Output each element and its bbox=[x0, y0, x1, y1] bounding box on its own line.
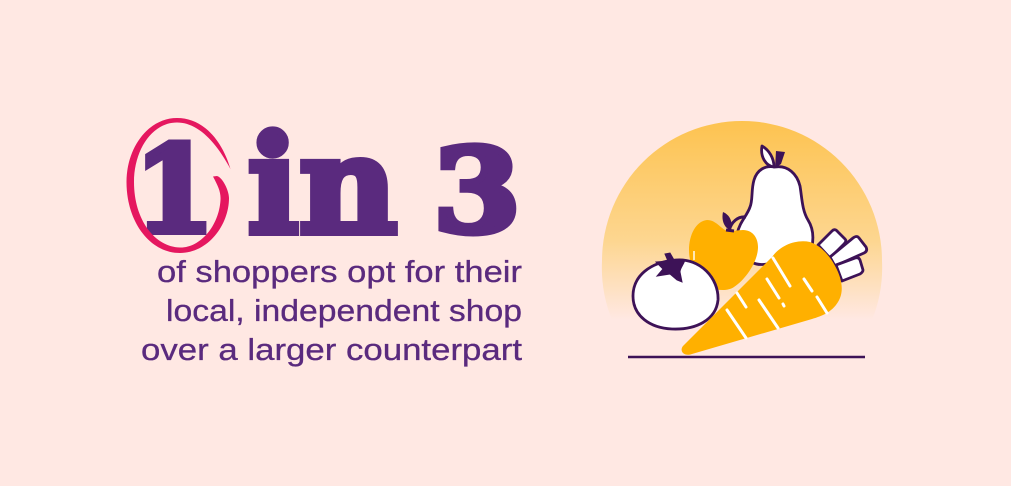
sun backdrop bbox=[602, 121, 882, 320]
body text bbox=[141, 254, 522, 367]
body text: over a larger counterpart bbox=[141, 332, 522, 367]
ground line bbox=[628, 356, 865, 358]
red hand-drawn circle around the 1 bbox=[126, 118, 230, 253]
illustration: fruit and vegetables bbox=[602, 121, 882, 357]
body text: of shoppers opt for their bbox=[157, 254, 522, 289]
headline: 1 in 3 bbox=[134, 106, 520, 264]
icon: pear bbox=[737, 146, 813, 265]
body text: local, independent shop bbox=[166, 293, 522, 328]
headline: 1 in 3: in bbox=[248, 106, 398, 264]
icon: apple bbox=[689, 212, 758, 290]
icon: carrot tops bbox=[818, 230, 867, 281]
headline: 1 in 3: 3 bbox=[434, 124, 520, 260]
icon: carrot bbox=[682, 241, 842, 355]
icon: tomato bbox=[633, 253, 718, 329]
headline: 1 in 3: 1 bbox=[134, 120, 214, 260]
